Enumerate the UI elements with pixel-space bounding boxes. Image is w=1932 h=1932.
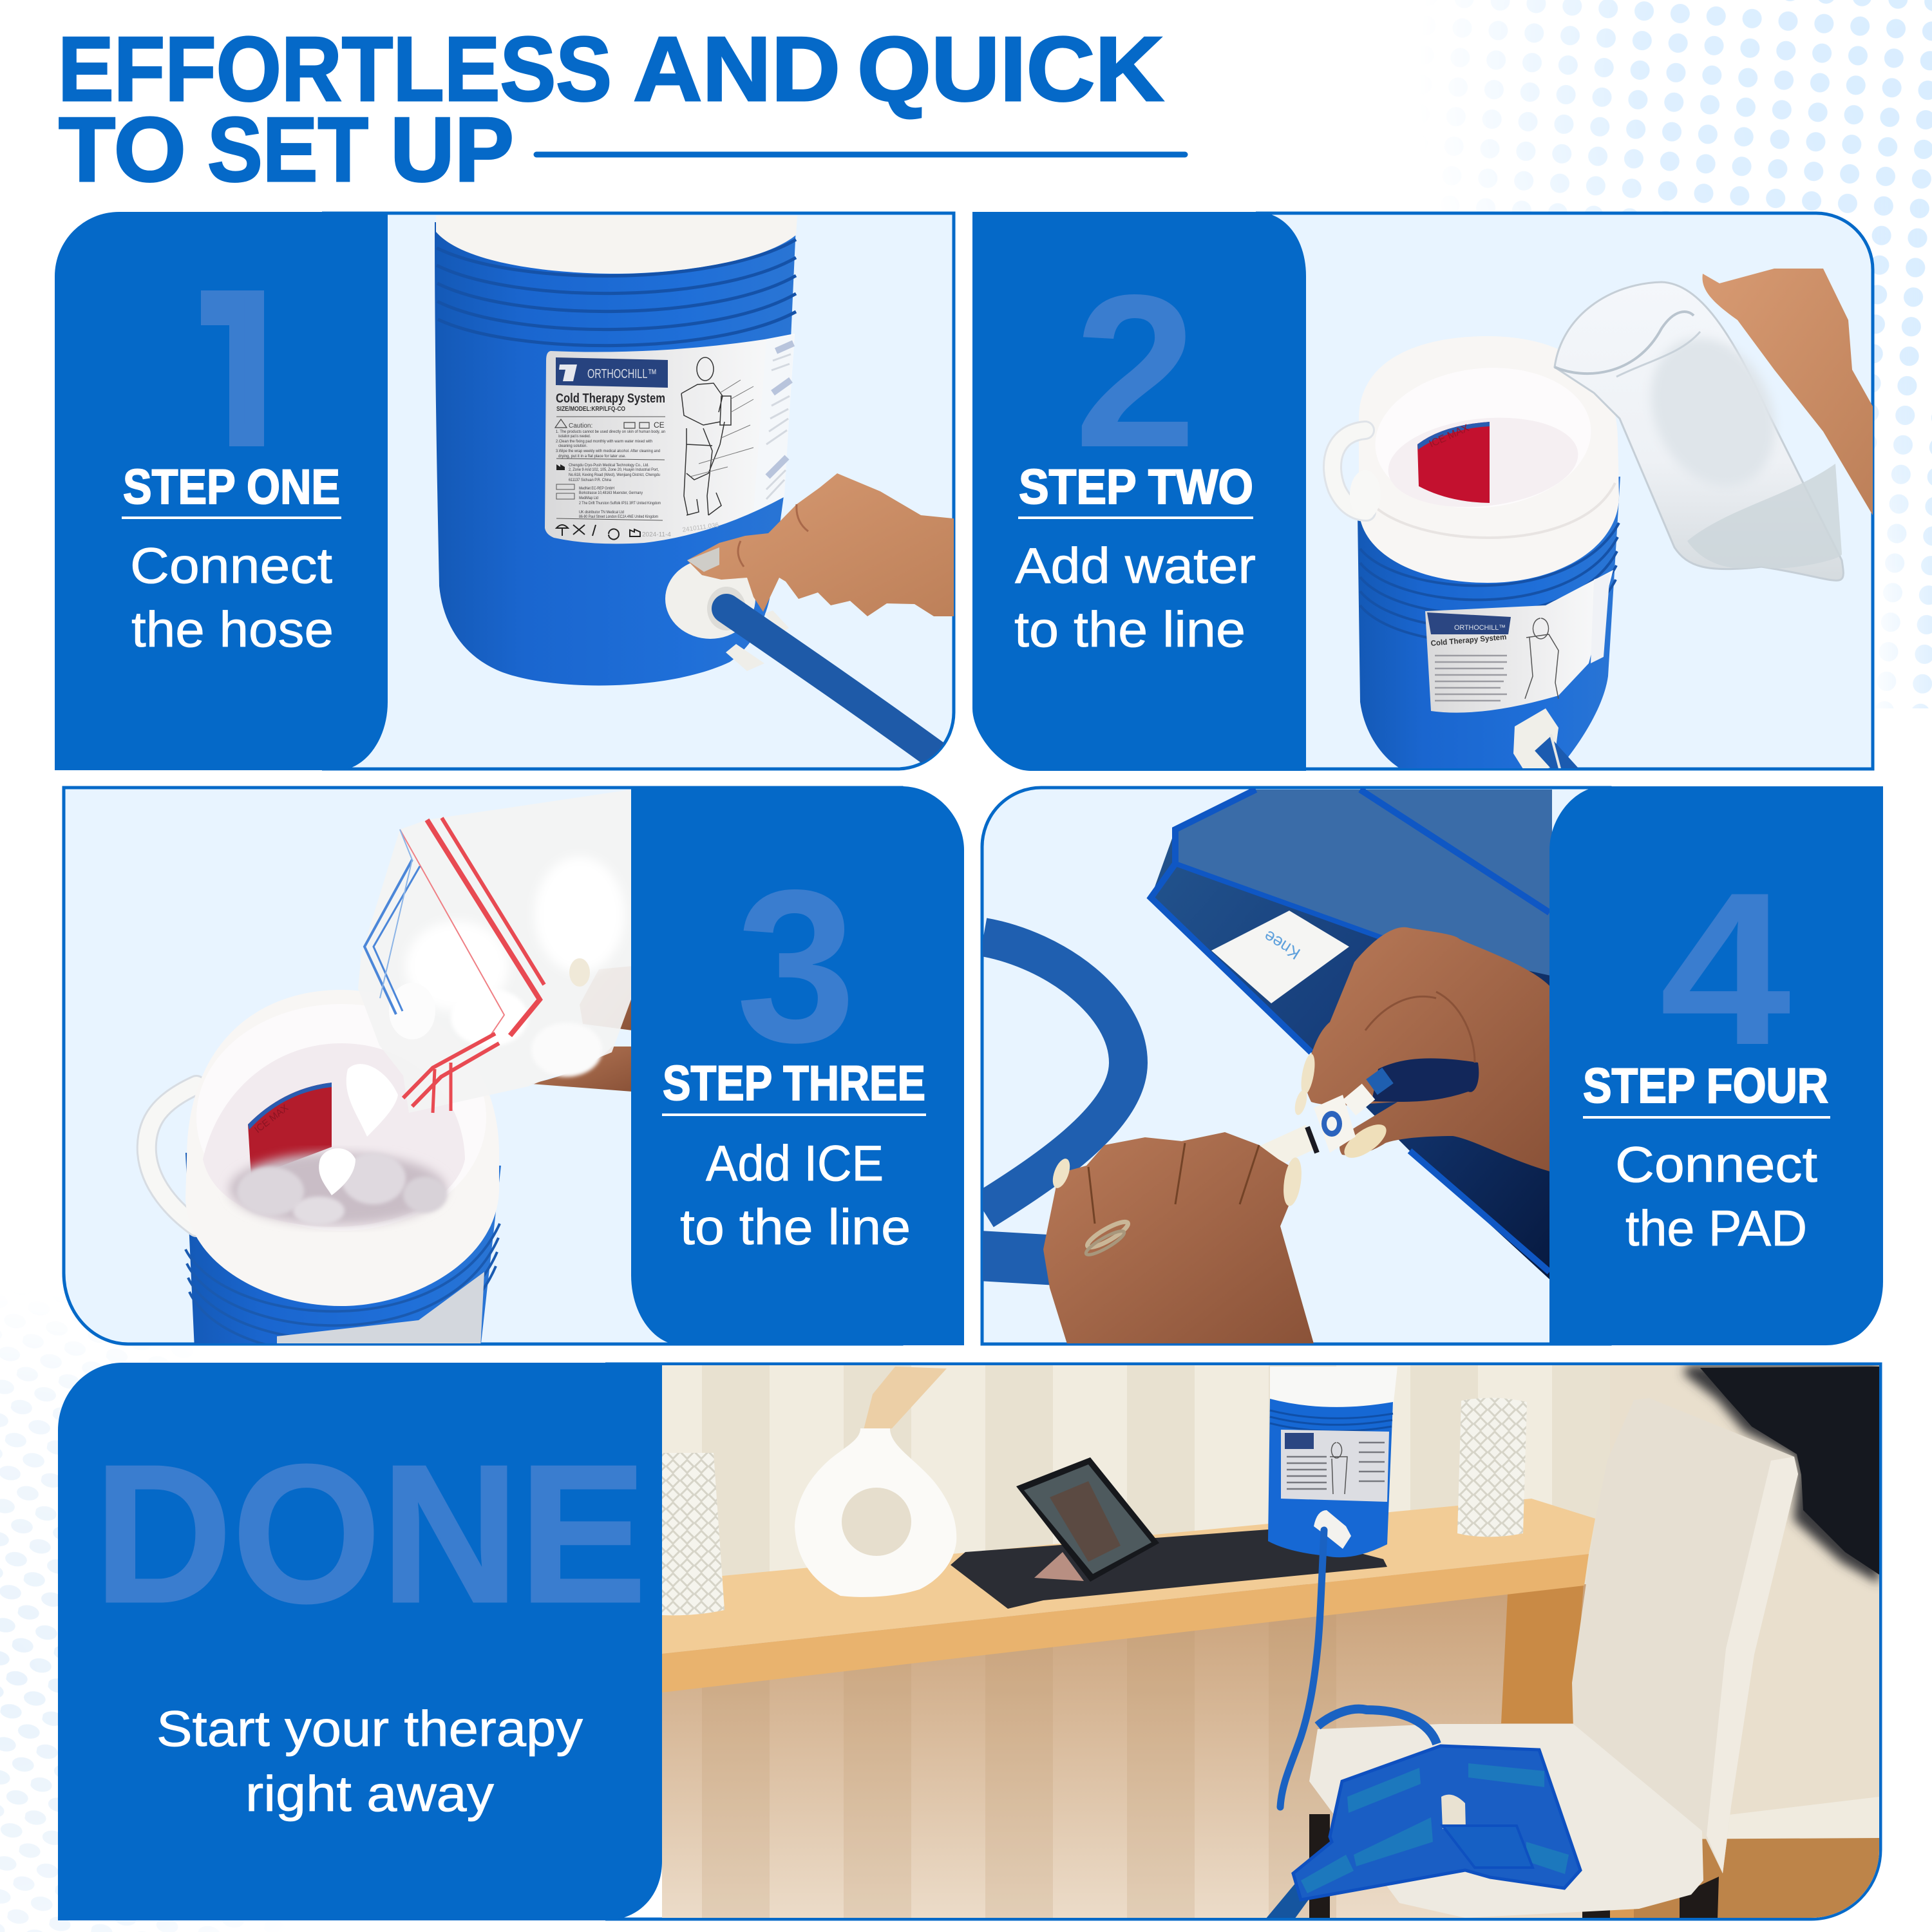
icon: wall fur — [1683, 1365, 1879, 1584]
step description: Add water — [1015, 537, 1256, 594]
closing description: Start your therapy — [156, 1700, 583, 1757]
heading: STEP TWO — [1019, 460, 1253, 515]
candle holder right — [1457, 1397, 1527, 1537]
photo: jug with hose being connected: No.618, Kexing Road (West), Wenjiang District, Chengdu — [569, 473, 660, 477]
knee pad — [1265, 1746, 1580, 1919]
photo: jug with hose being connected: MediMap Ltd — [579, 497, 598, 500]
blue text block — [58, 1363, 662, 1920]
photo: water poured into jug — [1332, 269, 1873, 779]
mat — [951, 1530, 1387, 1609]
table — [662, 1499, 1595, 1723]
photo: jug with hose being connected: isolation pad is needed. — [558, 435, 591, 439]
step description — [130, 537, 334, 658]
title: TO — [59, 99, 186, 201]
photo: jug with hose being connected: UK distributor TN Medical Ltd — [579, 511, 624, 515]
step number: 4 — [1660, 847, 1792, 1090]
photo: connecting hose to pad — [979, 790, 1565, 1346]
step description: to the line — [1014, 601, 1245, 658]
step number: 2 — [1074, 249, 1197, 493]
large word: DONE: DONE — [94, 1424, 647, 1643]
title: UP — [390, 99, 514, 201]
panel: step three — [64, 786, 964, 1354]
title: QUICK — [857, 18, 1164, 120]
step number: 1 — [191, 249, 271, 493]
photo: jug with hose being connected — [435, 216, 960, 763]
photo: jug with hose being connected: 1. The products cannot be used directly on skin of human body, an — [556, 430, 665, 434]
step description — [680, 1135, 911, 1255]
panel: step one — [55, 212, 960, 770]
photo: jug with hose being connected: ORTHOCHILL™ — [587, 367, 657, 381]
candle holder left — [662, 1453, 724, 1615]
photo: ice poured into jug — [147, 790, 632, 1354]
vase — [795, 1367, 956, 1597]
step number — [201, 290, 264, 446]
step description — [1615, 1136, 1817, 1256]
photo: water poured into jug: Cold Therapy System — [1430, 632, 1507, 648]
heading: STEP THREE — [663, 1056, 925, 1111]
blue text block — [1549, 786, 1883, 1345]
chair — [1309, 1398, 1798, 1919]
photo: jug with hose being connected: CE — [654, 421, 665, 430]
hose — [1280, 1530, 1324, 1807]
panel: step four — [979, 786, 1883, 1346]
title — [58, 18, 1185, 201]
tablet — [1016, 1457, 1159, 1582]
title: AND — [633, 18, 840, 120]
blue text block — [55, 212, 388, 770]
step description: Connect — [130, 537, 332, 594]
step description: Add ICE — [706, 1135, 884, 1191]
photo: water poured into jug: ICE MAX — [1428, 422, 1471, 450]
heading: STEP ONE — [123, 460, 340, 515]
jug — [1268, 1367, 1397, 1557]
photo: system set up on console table — [662, 1365, 1879, 1919]
panel frame — [982, 788, 1610, 1344]
photo: jug with hose being connected: 2024-11-4 — [642, 531, 671, 538]
step description: Connect — [1615, 1136, 1817, 1193]
heading: STEP FOUR — [1583, 1059, 1828, 1113]
photo: jug with hose being connected: 2.Clean the fixing pad monthly with warm water mixed with — [556, 440, 652, 444]
photo: jug with hose being connected: 86-90 Paul Street London EC2A 4NE United Kingdom — [579, 515, 658, 519]
photo: jug with hose being connected: 2410111.036 — [682, 522, 719, 534]
panel frame — [322, 213, 954, 769]
photo: ice poured into jug: ICE MAX — [252, 1103, 290, 1135]
photo: water poured into jug: ORTHOCHILL™ — [1454, 624, 1506, 632]
title: SET — [207, 99, 368, 201]
photo: jug with hose being connected: Chengdu Cryo-Push Medical Technology Co., Ltd. — [569, 464, 649, 468]
photo: jug with hose being connected: cleaning solution. — [558, 444, 587, 448]
panel frame — [64, 788, 902, 1344]
photo: jug with hose being connected: Borkstrasse 10,48163 Muenster, Germany — [579, 491, 643, 495]
panel frame — [1256, 213, 1873, 769]
photo: connecting hose to pad: Knee — [1260, 927, 1303, 963]
photo: jug with hose being connected: 3.Wipe the wrap weekly with medical alcohol. After cleaning and — [556, 450, 660, 453]
step number: 3 — [736, 844, 856, 1088]
photo: jug with hose being connected: SIZE/MODEL:KRP/LFQ-CO — [556, 406, 625, 413]
panel: step two — [972, 212, 1873, 779]
closing description: right away — [245, 1765, 494, 1822]
title: EFFORTLESS — [58, 18, 612, 120]
blue text block — [972, 212, 1306, 771]
panel: done — [58, 1363, 1880, 1920]
photo: jug with hose being connected: MedNet EC-REP GmbH — [579, 487, 614, 491]
photo: jug with hose being connected: 611137 Sichuan P.R. China — [569, 478, 612, 482]
photo: jug with hose being connected: Caution: — [569, 422, 592, 430]
photo: jug with hose being connected: Cold Therapy System — [556, 392, 665, 406]
step description: the PAD — [1625, 1200, 1807, 1256]
blue text block — [631, 786, 964, 1345]
photo: jug with hose being connected: drying, put it in a flat place for later use. — [558, 455, 626, 459]
pitcher — [1555, 282, 1843, 580]
step description: the hose — [131, 601, 334, 658]
closing description — [156, 1700, 583, 1822]
photo: jug with hose being connected: 2, Zone 9 And 102, 105, Zone 20, Huayin Industrial Port, — [569, 468, 659, 472]
photo: jug with hose being connected: 2 The Drift Thurston Suffolk IP31 3RT United Kingdom — [579, 502, 661, 506]
step description — [1014, 537, 1256, 658]
panel frame — [605, 1364, 1880, 1919]
step description: to the line — [680, 1198, 911, 1255]
